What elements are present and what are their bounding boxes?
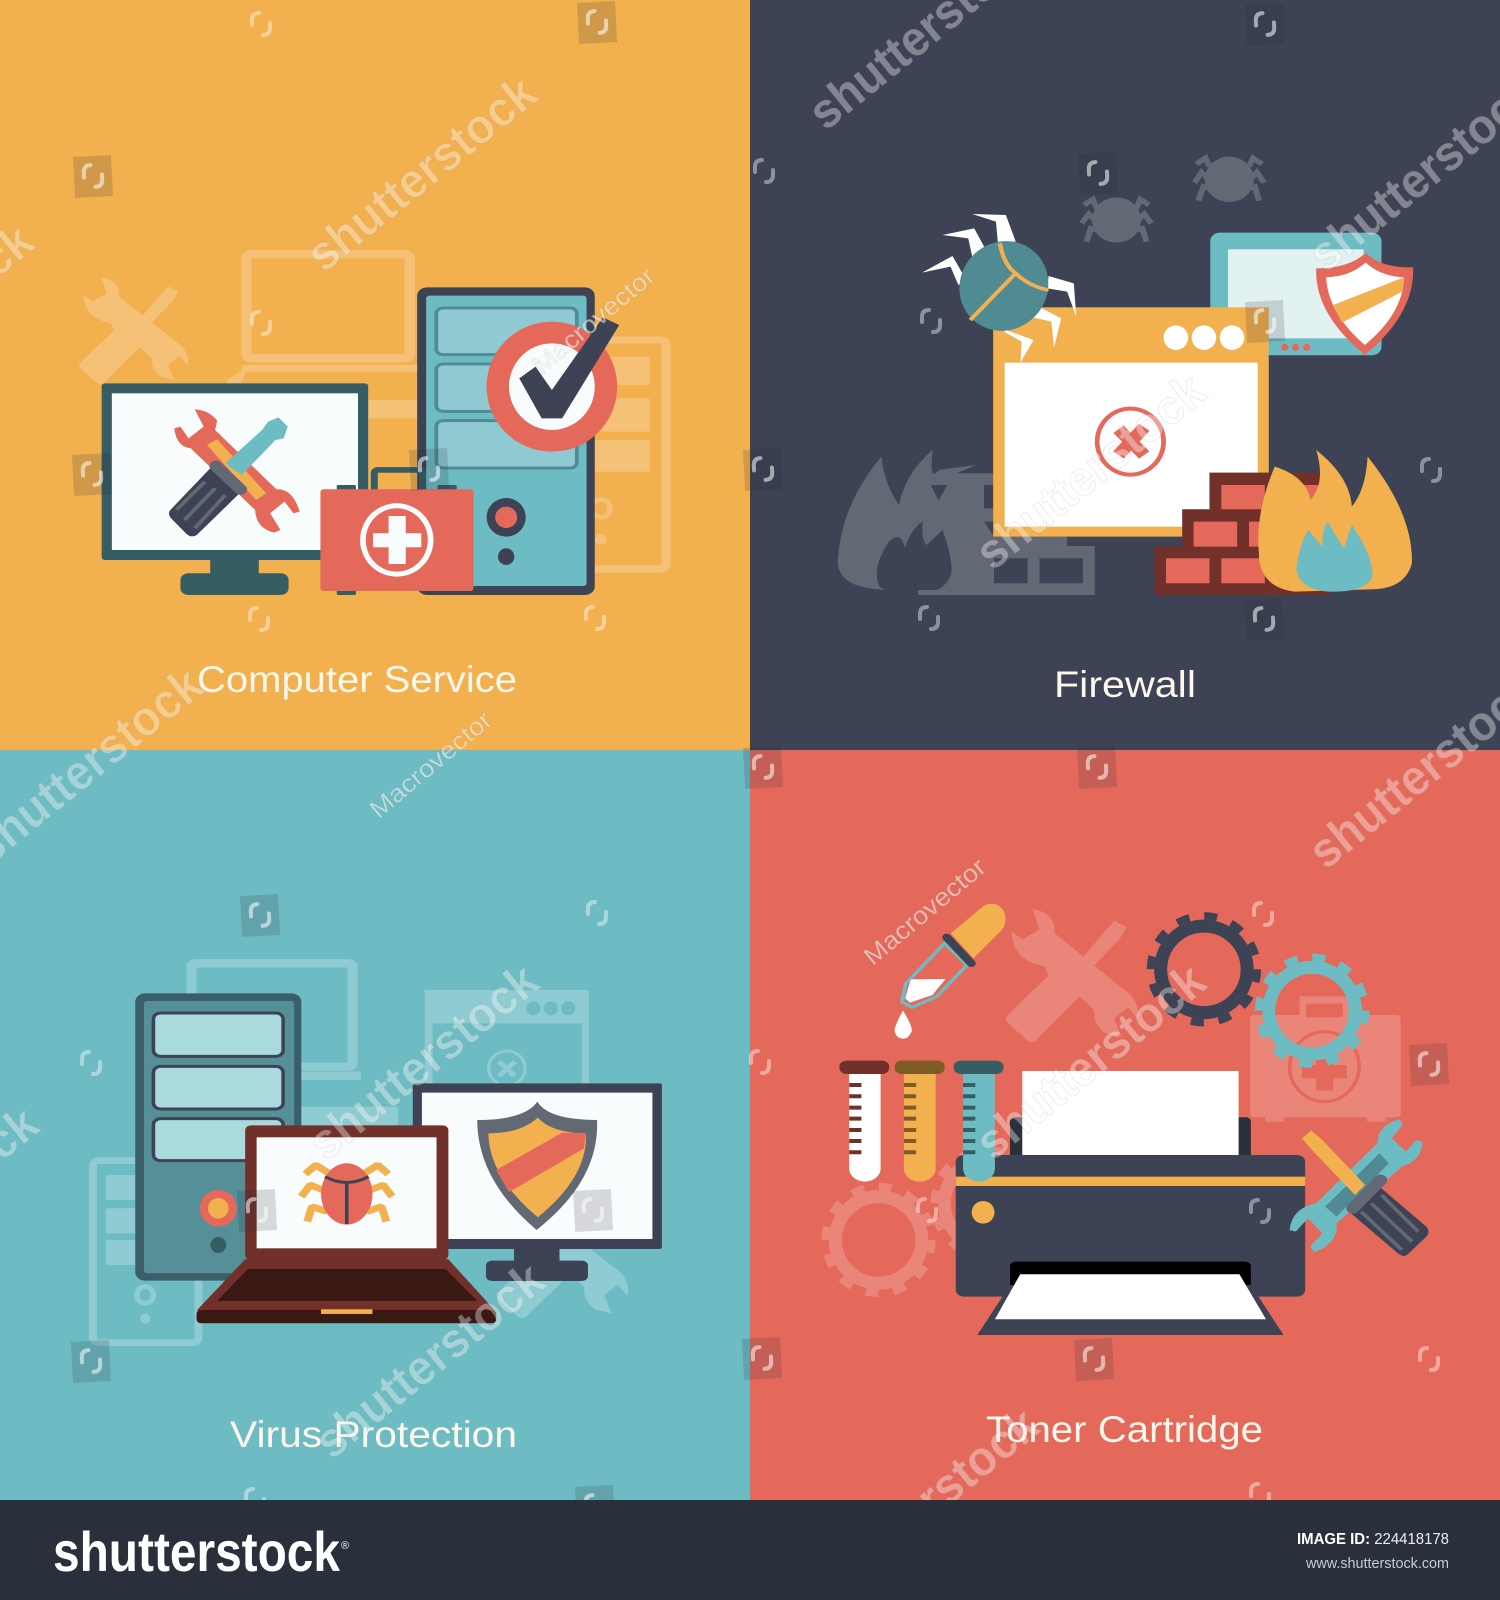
shutterstock watermarks: shutterstock: [966, 953, 1216, 1170]
illustration: toner cartridge icons: [825, 904, 1428, 1335]
ghost flame and bricks: [838, 450, 1095, 595]
panel: virus protection: [0, 750, 750, 1500]
shield: [477, 1102, 597, 1230]
illustration: firewall icons: [838, 157, 1413, 595]
image id: IMAGE ID: 224418178: [1297, 1531, 1449, 1548]
monitor: [102, 383, 368, 595]
tablet: [1210, 233, 1381, 355]
panel: computer service: [0, 0, 750, 750]
website url: www.shutterstock.com: [1305, 1555, 1449, 1572]
macrovector watermarks: Macrovector: [528, 262, 660, 380]
teal gear: [1259, 957, 1366, 1064]
ghost bugs: [1082, 157, 1264, 243]
title: virus protection: Virus Protection: [230, 1414, 517, 1455]
ghost gears: [825, 1150, 1041, 1293]
laptop: [197, 1125, 496, 1323]
ghost tools: [496, 1190, 628, 1318]
dark gear: [1150, 916, 1257, 1023]
macrovector watermarks: [365, 262, 991, 971]
footer bar: [0, 1500, 1500, 1600]
ghost first aid kit: [1250, 1000, 1401, 1122]
panel: toner cartridge: [750, 750, 1500, 1500]
panel: firewall: [750, 0, 1500, 750]
ghost monitor: [191, 963, 398, 1127]
dropper: [894, 904, 1006, 1039]
error icon: [1095, 407, 1166, 477]
shutterstock watermarks: shutterstock: [305, 1252, 555, 1469]
browser window: [993, 307, 1269, 537]
shutterstock watermarks: shutterstock: [297, 65, 547, 282]
footer logo: ®: [341, 1540, 349, 1552]
printer: [956, 1071, 1305, 1335]
illustration: computer service icons: [79, 254, 666, 595]
first aid kit: [320, 470, 474, 595]
bug: [301, 1163, 392, 1225]
ghost tools: [1006, 909, 1138, 1042]
ghost laptop: [227, 254, 417, 418]
ghost tower: [93, 1161, 199, 1343]
macrovector watermarks: Macrovector: [859, 853, 991, 971]
monitor: [413, 1083, 662, 1281]
footer logo: shutterstock: [53, 1520, 341, 1583]
title: firewall: Firewall: [1054, 664, 1196, 705]
computer tower: [417, 287, 595, 595]
ghost tower: [574, 340, 666, 569]
computer tower: [135, 993, 301, 1281]
title: computer service: Computer Service: [197, 659, 517, 700]
ghost window: [425, 990, 589, 1087]
illustration: virus protection icons: [93, 963, 662, 1343]
flame: [1258, 450, 1412, 592]
beetle: [922, 214, 1076, 363]
wrench: [174, 409, 300, 533]
title: toner cartridge: Toner Cartridge: [986, 1409, 1263, 1450]
shutterstock watermarks: shutterstock: [966, 363, 1216, 580]
shield: [1316, 253, 1413, 355]
check badge: [487, 317, 619, 452]
shutterstock watermarks: shutterstock: [299, 953, 549, 1170]
screwdriver: [169, 417, 288, 536]
tools: [1290, 1119, 1428, 1256]
macrovector watermarks: Macrovector: [365, 706, 497, 824]
test tubes: [839, 1061, 1003, 1182]
ghost tools: [79, 277, 188, 384]
brick wall: [1155, 473, 1330, 595]
